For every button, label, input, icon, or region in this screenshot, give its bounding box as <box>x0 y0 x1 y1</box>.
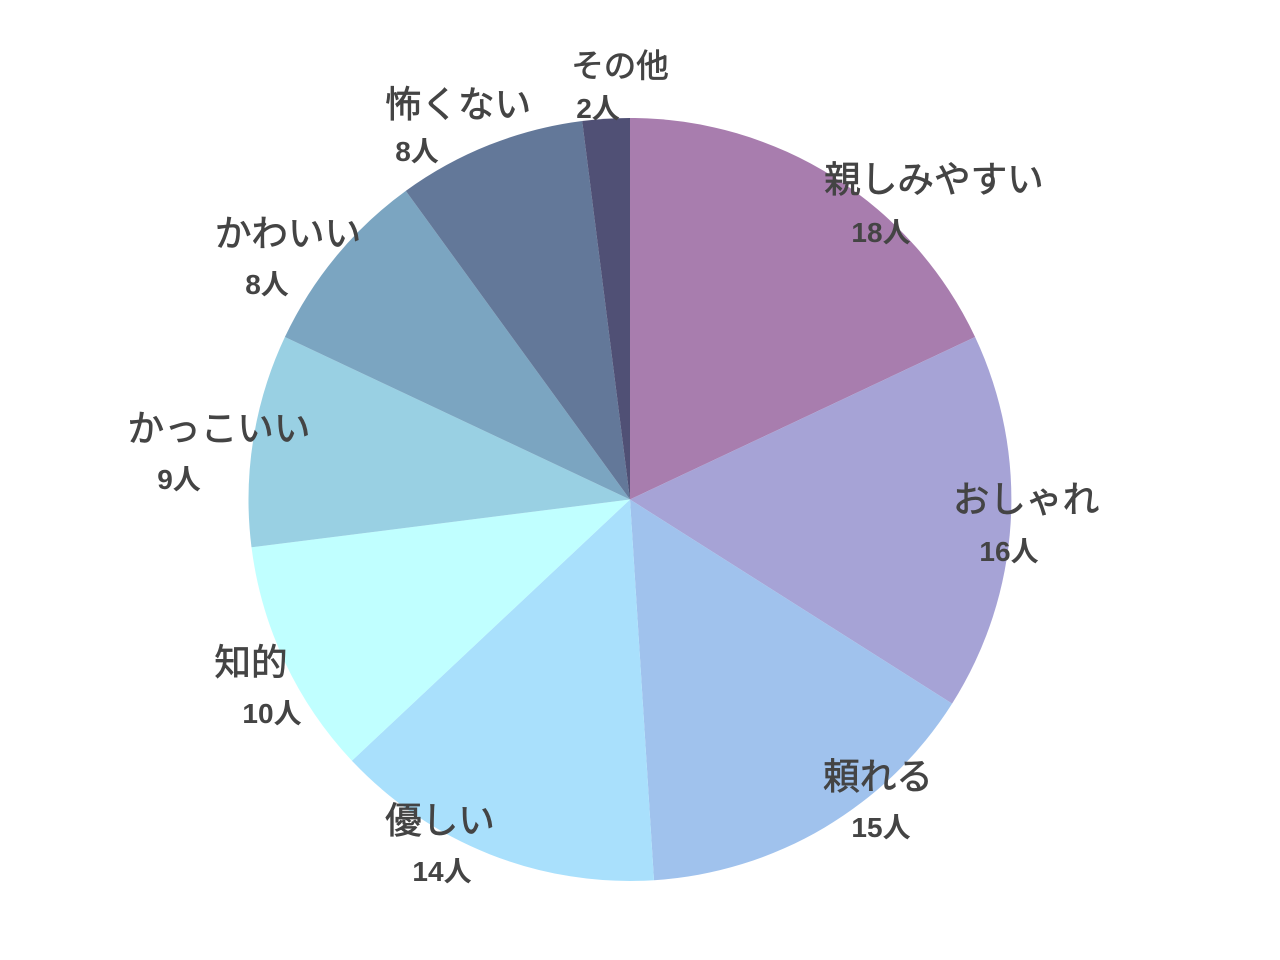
label: かわいい 8人: 8人 <box>245 269 289 300</box>
slice: 頼れる 15 <box>630 500 952 880</box>
slice: 親しみやすい 18 <box>630 118 975 500</box>
slice: かっこいい 9 <box>249 337 630 547</box>
label: かっこいい 9人 <box>128 408 310 495</box>
label: 怖くない 8人: 8人 <box>395 136 439 167</box>
slice: おしゃれ 16 <box>630 337 1011 704</box>
label: その他 2人 <box>571 48 669 124</box>
label: かわいい 8人: かわいい <box>215 213 361 254</box>
label: 親しみやすい 18人: 18人 <box>851 217 911 248</box>
label: 知的 10人: 10人 <box>242 698 302 729</box>
pie chart <box>249 118 1011 881</box>
label: 怖くない 8人 <box>385 84 531 167</box>
label: かっこいい 9人: かっこいい <box>128 408 310 449</box>
label: 頼れる 15人 <box>823 756 933 843</box>
slice: 優しい 14 <box>352 500 654 881</box>
slice: 怖くない 8 <box>406 121 630 500</box>
label: 親しみやすい 18人: 親しみやすい <box>824 159 1044 200</box>
label: 知的 10人 <box>214 642 302 729</box>
label: その他 2人: 2人 <box>576 93 620 124</box>
label: その他 2人: その他 <box>571 48 669 84</box>
slice: 知的 10 <box>252 500 630 761</box>
slice: かわいい 8 <box>285 191 630 500</box>
label: 知的 10人: 知的 <box>214 642 288 683</box>
label: おしゃれ 16人 <box>953 479 1099 567</box>
label: 親しみやすい 18人 <box>824 159 1044 248</box>
label: おしゃれ 16人: おしゃれ <box>953 479 1099 520</box>
label: おしゃれ 16人: 16人 <box>979 536 1039 567</box>
label: かわいい 8人 <box>215 213 361 300</box>
label: かっこいい 9人: 9人 <box>157 464 201 495</box>
label: 優しい 14人: 優しい <box>385 800 495 841</box>
label: 優しい 14人 <box>385 800 495 887</box>
label: 頼れる 15人: 15人 <box>851 812 911 843</box>
label: 怖くない 8人: 怖くない <box>385 84 531 125</box>
slice: その他 2 <box>582 118 630 500</box>
label: 頼れる 15人: 頼れる <box>823 756 933 797</box>
label: 優しい 14人: 14人 <box>412 856 472 887</box>
